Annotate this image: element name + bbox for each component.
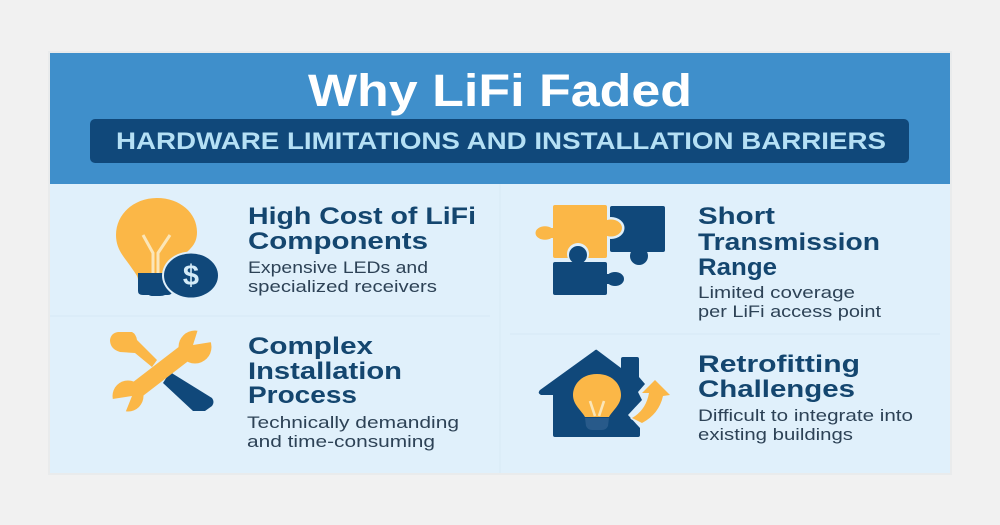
subtitle bar — [90, 119, 909, 163]
icon: puzzle pieces — [536, 205, 665, 295]
icon: light bulb with dollar: $ — [183, 260, 199, 292]
description: retrofitting: Difficult to integrate into — [698, 407, 913, 425]
title: Why LiFi Faded — [308, 65, 692, 116]
heading: retrofitting: Challenges — [698, 376, 855, 403]
panel: short range — [536, 203, 881, 321]
heading: short range: Short — [698, 203, 775, 230]
infographic card — [50, 53, 950, 473]
heading: retrofitting: Retrofitting — [698, 351, 860, 378]
description: short range: per LiFi access point — [698, 303, 881, 321]
icon: house with bulb and arrow — [539, 350, 670, 437]
heading: complex installation: Installation — [248, 358, 402, 385]
heading: high cost: High Cost of LiFi — [248, 203, 476, 230]
heading: retrofitting — [698, 351, 860, 403]
panel: complex installation — [106, 326, 459, 451]
description: complex installation: Technically demanding — [247, 414, 459, 432]
panel: retrofitting — [539, 350, 913, 444]
description: short range — [698, 284, 881, 321]
description: short range: Limited coverage — [698, 284, 855, 302]
subtitle bar: HARDWARE LIMITATIONS AND INSTALLATION BARRIERS — [116, 128, 886, 155]
heading: complex installation: Process — [248, 382, 357, 409]
description: high cost: Expensive LEDs and — [248, 259, 428, 277]
header band — [50, 53, 950, 184]
heading: short range: Range — [698, 254, 777, 281]
heading: complex installation — [248, 333, 402, 409]
panel: high cost — [116, 198, 476, 300]
description: high cost — [248, 259, 437, 296]
heading: short range — [698, 203, 880, 281]
description: retrofitting: existing buildings — [698, 426, 853, 444]
description: retrofitting — [698, 407, 913, 444]
icon: light bulb with dollar — [116, 198, 220, 300]
description: high cost: specialized receivers — [248, 278, 437, 296]
description: complex installation — [247, 414, 459, 451]
description: complex installation: and time-consuming — [247, 433, 435, 451]
heading: high cost: Components — [248, 228, 428, 255]
heading: complex installation: Complex — [248, 333, 373, 360]
heading: high cost — [248, 203, 476, 255]
heading: short range: Transmission — [698, 229, 880, 256]
icon: crossed wrench and screwdriver — [106, 326, 218, 416]
